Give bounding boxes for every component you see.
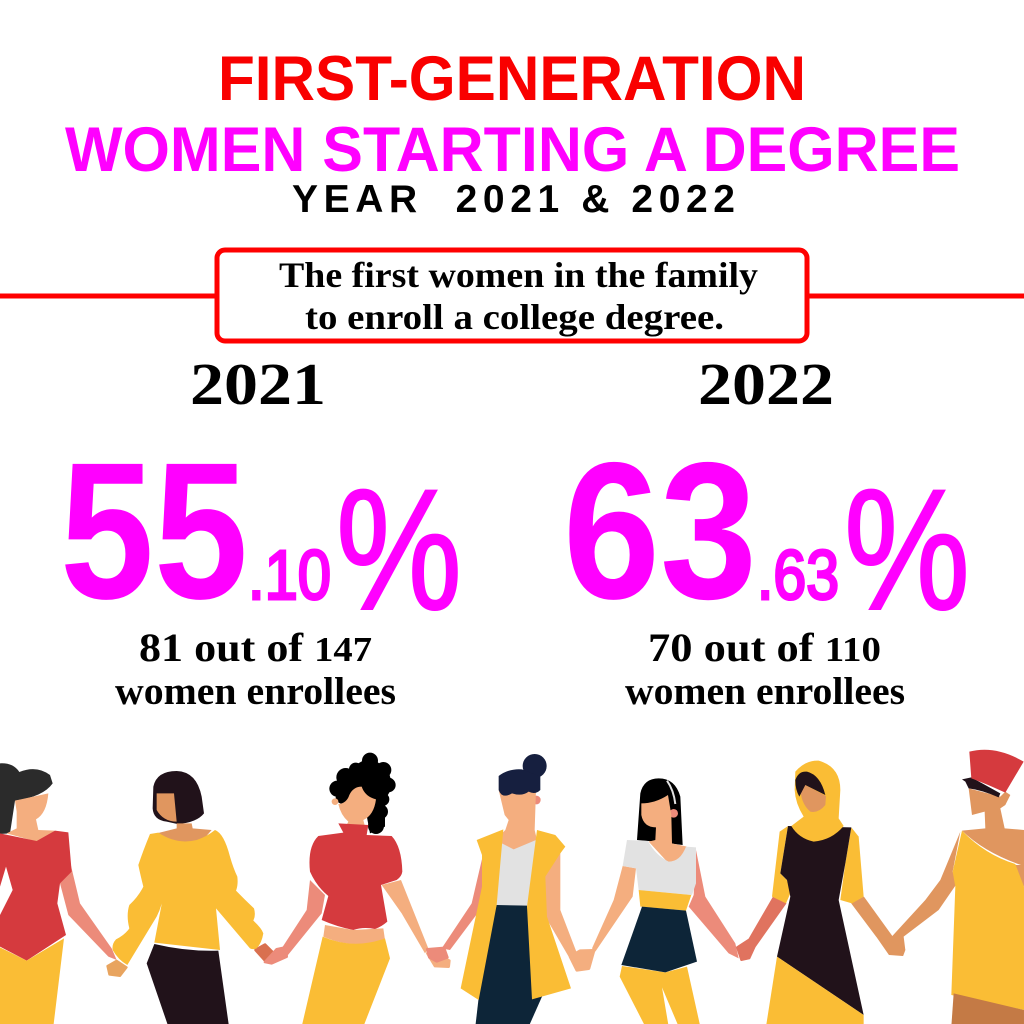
panel: 2022 statistic: 63 <box>563 422 757 640</box>
panel: 2022 statistic <box>563 351 970 713</box>
panel: 2021 statistic: % <box>336 454 462 646</box>
panel: 2021 statistic: 2021 <box>190 351 326 417</box>
woman 2 <box>107 771 275 1024</box>
callout box: to enroll a college degree. <box>305 297 724 337</box>
panel: 2021 statistic: 81 out of 147 <box>139 625 372 670</box>
woman 5 <box>592 778 739 1024</box>
panel: 2022 statistic: women enrollees <box>625 670 905 713</box>
title: FIRST-GENERATION <box>218 44 806 114</box>
woman 6 <box>737 761 905 1024</box>
woman 1 <box>0 763 117 1024</box>
panel: 2022 statistic: .63 <box>757 536 839 614</box>
title: YEAR 2021 & 2022 <box>292 178 735 221</box>
woman 4 <box>442 754 594 1024</box>
title <box>65 44 960 221</box>
woman 3 <box>265 753 449 1024</box>
callout box: The first women in the family <box>279 255 758 295</box>
panel: 2021 statistic: 55 <box>60 422 248 640</box>
panel: 2021 statistic: .10 <box>248 536 331 614</box>
panel: 2022 statistic: % <box>844 454 970 646</box>
callout box <box>217 250 807 341</box>
illustration: row of women holding hands <box>0 750 1024 1024</box>
panel: 2021 statistic: women enrollees <box>115 670 396 713</box>
panel: 2022 statistic: 2022 <box>698 351 834 417</box>
woman 7 <box>889 750 1024 1024</box>
panel: 2021 statistic <box>60 351 462 713</box>
women 4 to 7 <box>442 750 1024 1024</box>
title: WOMEN STARTING A DEGREE <box>65 115 960 185</box>
panel: 2022 statistic: 70 out of 110 <box>648 625 881 670</box>
